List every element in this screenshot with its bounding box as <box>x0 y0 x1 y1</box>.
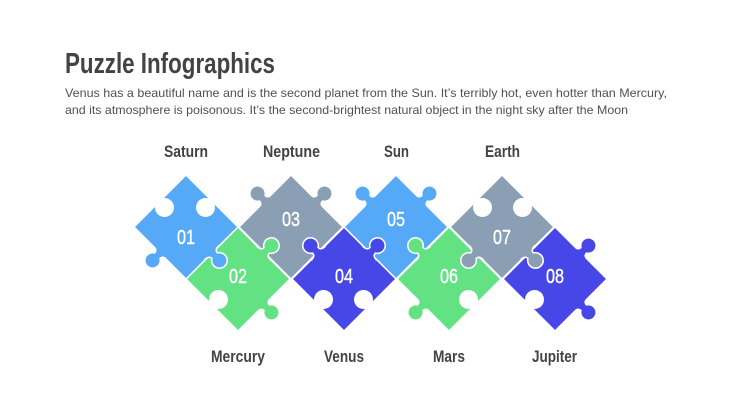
puzzle piece 05: 05 <box>387 209 405 231</box>
description text <box>65 86 667 117</box>
puzzle piece 02 <box>186 227 290 331</box>
label: Mars: Mars <box>433 348 465 366</box>
label: Mercury: Mercury <box>211 348 266 366</box>
puzzle piece 07 <box>450 175 554 279</box>
label: Saturn: Saturn <box>164 143 208 161</box>
puzzle piece 07: 07 <box>493 227 511 249</box>
description text: Venus has a beautiful name and is the second planet from the Sun. It’s terribly hot, even hotter than Mercury, <box>65 86 667 100</box>
label: Venus: Venus <box>324 348 364 366</box>
puzzle piece 06 <box>397 227 501 331</box>
puzzle piece 04 <box>292 227 396 331</box>
title: Puzzle Infographics <box>65 48 275 80</box>
label: Jupiter: Jupiter <box>532 348 577 366</box>
puzzle piece 04: 04 <box>335 266 353 288</box>
puzzle piece 06: 06 <box>440 266 458 288</box>
label: Neptune: Neptune <box>263 143 320 161</box>
puzzle piece 08 <box>503 227 607 331</box>
puzzle piece 01 <box>134 175 238 279</box>
puzzle piece 03 <box>239 175 343 279</box>
label: Sun: Sun <box>384 143 409 161</box>
puzzle piece 03: 03 <box>282 209 300 231</box>
description text: and its atmosphere is poisonous. It’s the second-brightest natural object in the night sky after the Moon <box>65 103 628 117</box>
puzzle piece 05 <box>344 175 448 279</box>
puzzle piece 01: 01 <box>177 227 195 249</box>
label: Earth: Earth <box>485 143 520 161</box>
puzzle piece 08: 08 <box>546 266 564 288</box>
puzzle piece 02: 02 <box>229 266 247 288</box>
